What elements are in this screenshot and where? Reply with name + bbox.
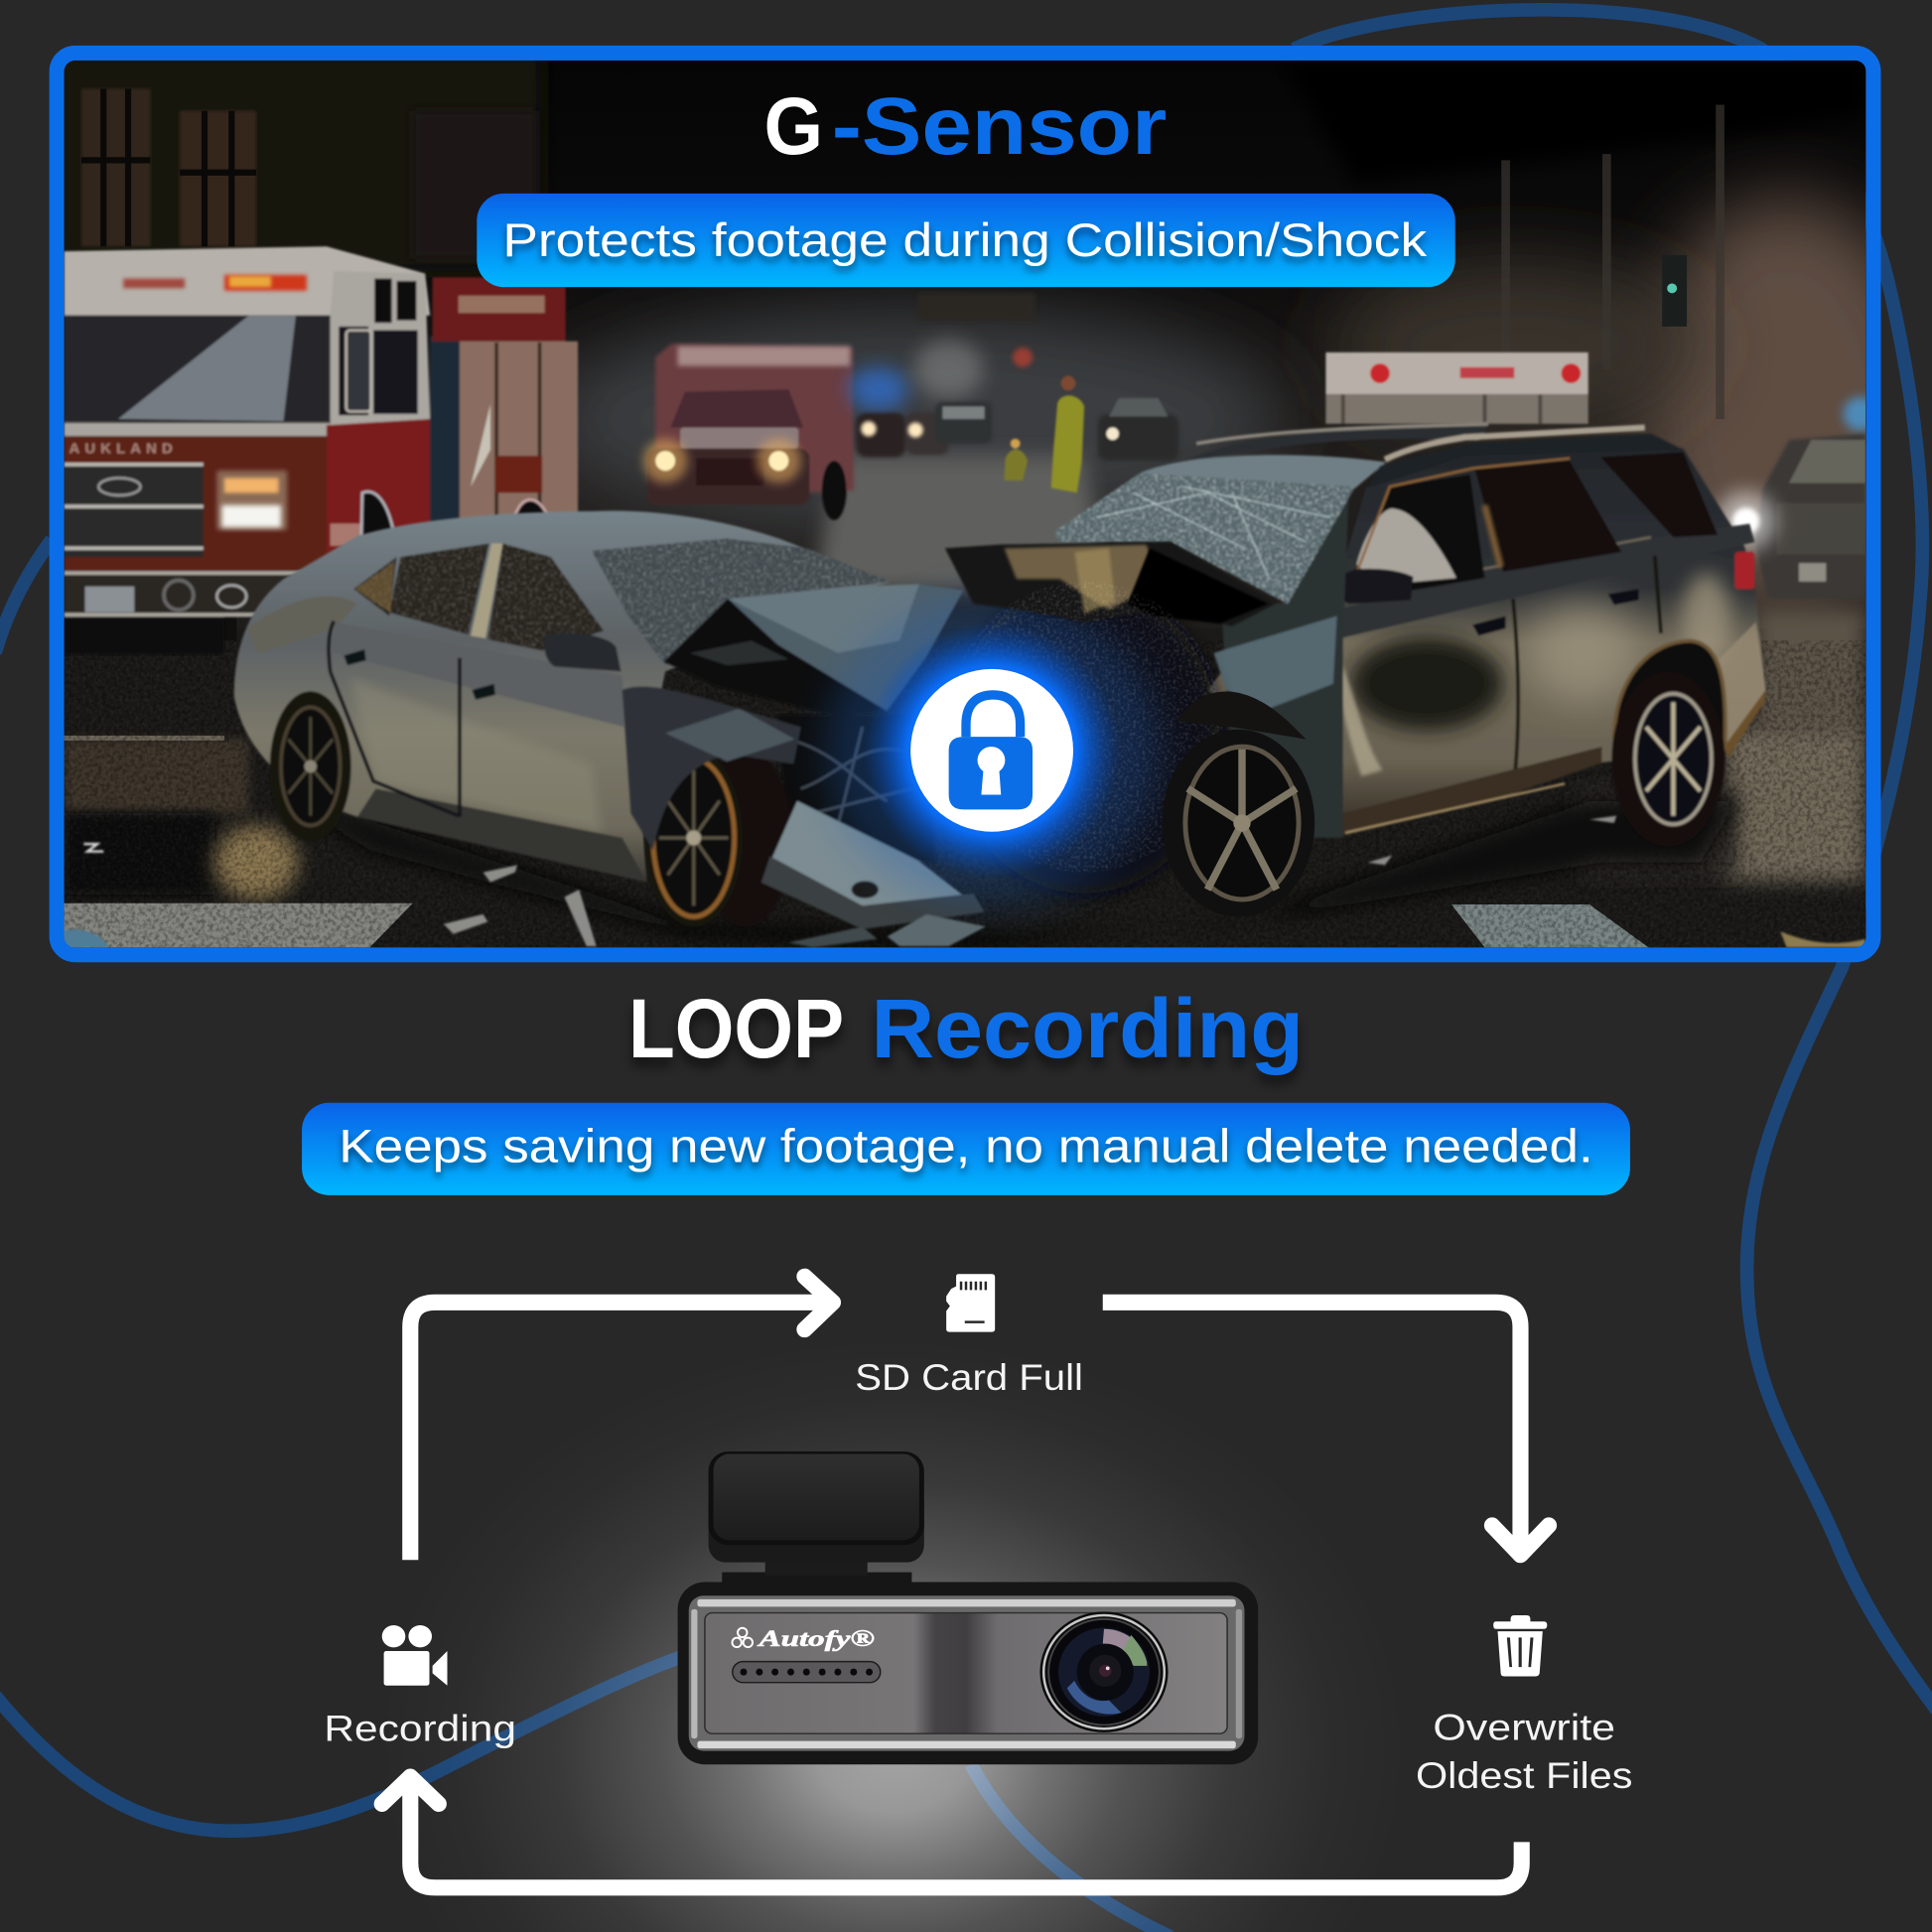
title: G-Sensor: G	[763, 81, 823, 172]
heading: LOOP Recording: Recording	[871, 982, 1304, 1075]
label: Overwrite Oldest Files	[1416, 1706, 1632, 1796]
pill: keeps saving footage: Keeps saving new footage, no manual delete needed.	[339, 1119, 1593, 1172]
arrow: overwrite back to recording	[382, 1777, 1522, 1887]
police SUV on the right	[1717, 397, 1877, 599]
heading: LOOP Recording	[628, 982, 1304, 1075]
pill: protects footage	[477, 194, 1455, 287]
wrecked bronze SUV	[1047, 424, 1765, 847]
wet road	[65, 456, 1865, 947]
arrow: SD card full to overwrite	[1103, 1303, 1549, 1555]
car shadows on the road	[271, 788, 1737, 947]
pill: keeps saving footage	[302, 1103, 1630, 1195]
heading: LOOP Recording: LOOP	[628, 982, 844, 1075]
title: G-Sensor: -Sensor	[832, 81, 1167, 172]
label: Recording: Recording	[324, 1708, 516, 1749]
label: SD Card Full: SD Card Full	[855, 1356, 1083, 1398]
icon: trash can	[1493, 1615, 1547, 1676]
pill: protects footage: Protects footage during Collision/Shock	[502, 213, 1428, 266]
fire truck: AUKLAND	[69, 442, 173, 458]
ambulance in the distance	[643, 344, 854, 520]
camera body	[678, 1583, 1258, 1764]
overwrite step	[1416, 1615, 1632, 1796]
icon: padlock with glow	[864, 622, 1120, 879]
brand logo: Autofy®	[757, 1626, 875, 1652]
recording step	[324, 1625, 516, 1749]
mount	[709, 1451, 924, 1587]
label: Overwrite Oldest Files: Overwrite	[1433, 1706, 1615, 1747]
loop arrows	[382, 1277, 1549, 1887]
icon: micro SD card	[946, 1274, 995, 1332]
sedan crushed front	[622, 584, 985, 929]
camera lens	[1039, 1611, 1169, 1732]
dash cam product	[678, 1451, 1258, 1764]
buildings and street background	[50, 50, 1932, 617]
SUV crushed front and debris centre	[826, 542, 1314, 916]
crash photo illustration	[50, 50, 1932, 947]
dash cam spotlight glow	[296, 1307, 1503, 1932]
brand logo	[732, 1626, 875, 1652]
white vehicle behind SUV	[1325, 352, 1588, 424]
panel: G-Sensor crash scene	[50, 50, 1932, 955]
blue panel frame	[57, 53, 1873, 955]
speaker grille	[733, 1662, 881, 1683]
arrow: recording to SD card full	[410, 1277, 833, 1560]
SD card step	[855, 1274, 1083, 1398]
fire truck	[65, 246, 578, 654]
wrecked grey sedan	[234, 511, 899, 883]
icon: video camera	[382, 1625, 448, 1686]
label: Overwrite Oldest Files: Oldest Files	[1416, 1754, 1632, 1796]
road debris	[65, 816, 1865, 947]
distant traffic and responders	[849, 341, 1179, 492]
